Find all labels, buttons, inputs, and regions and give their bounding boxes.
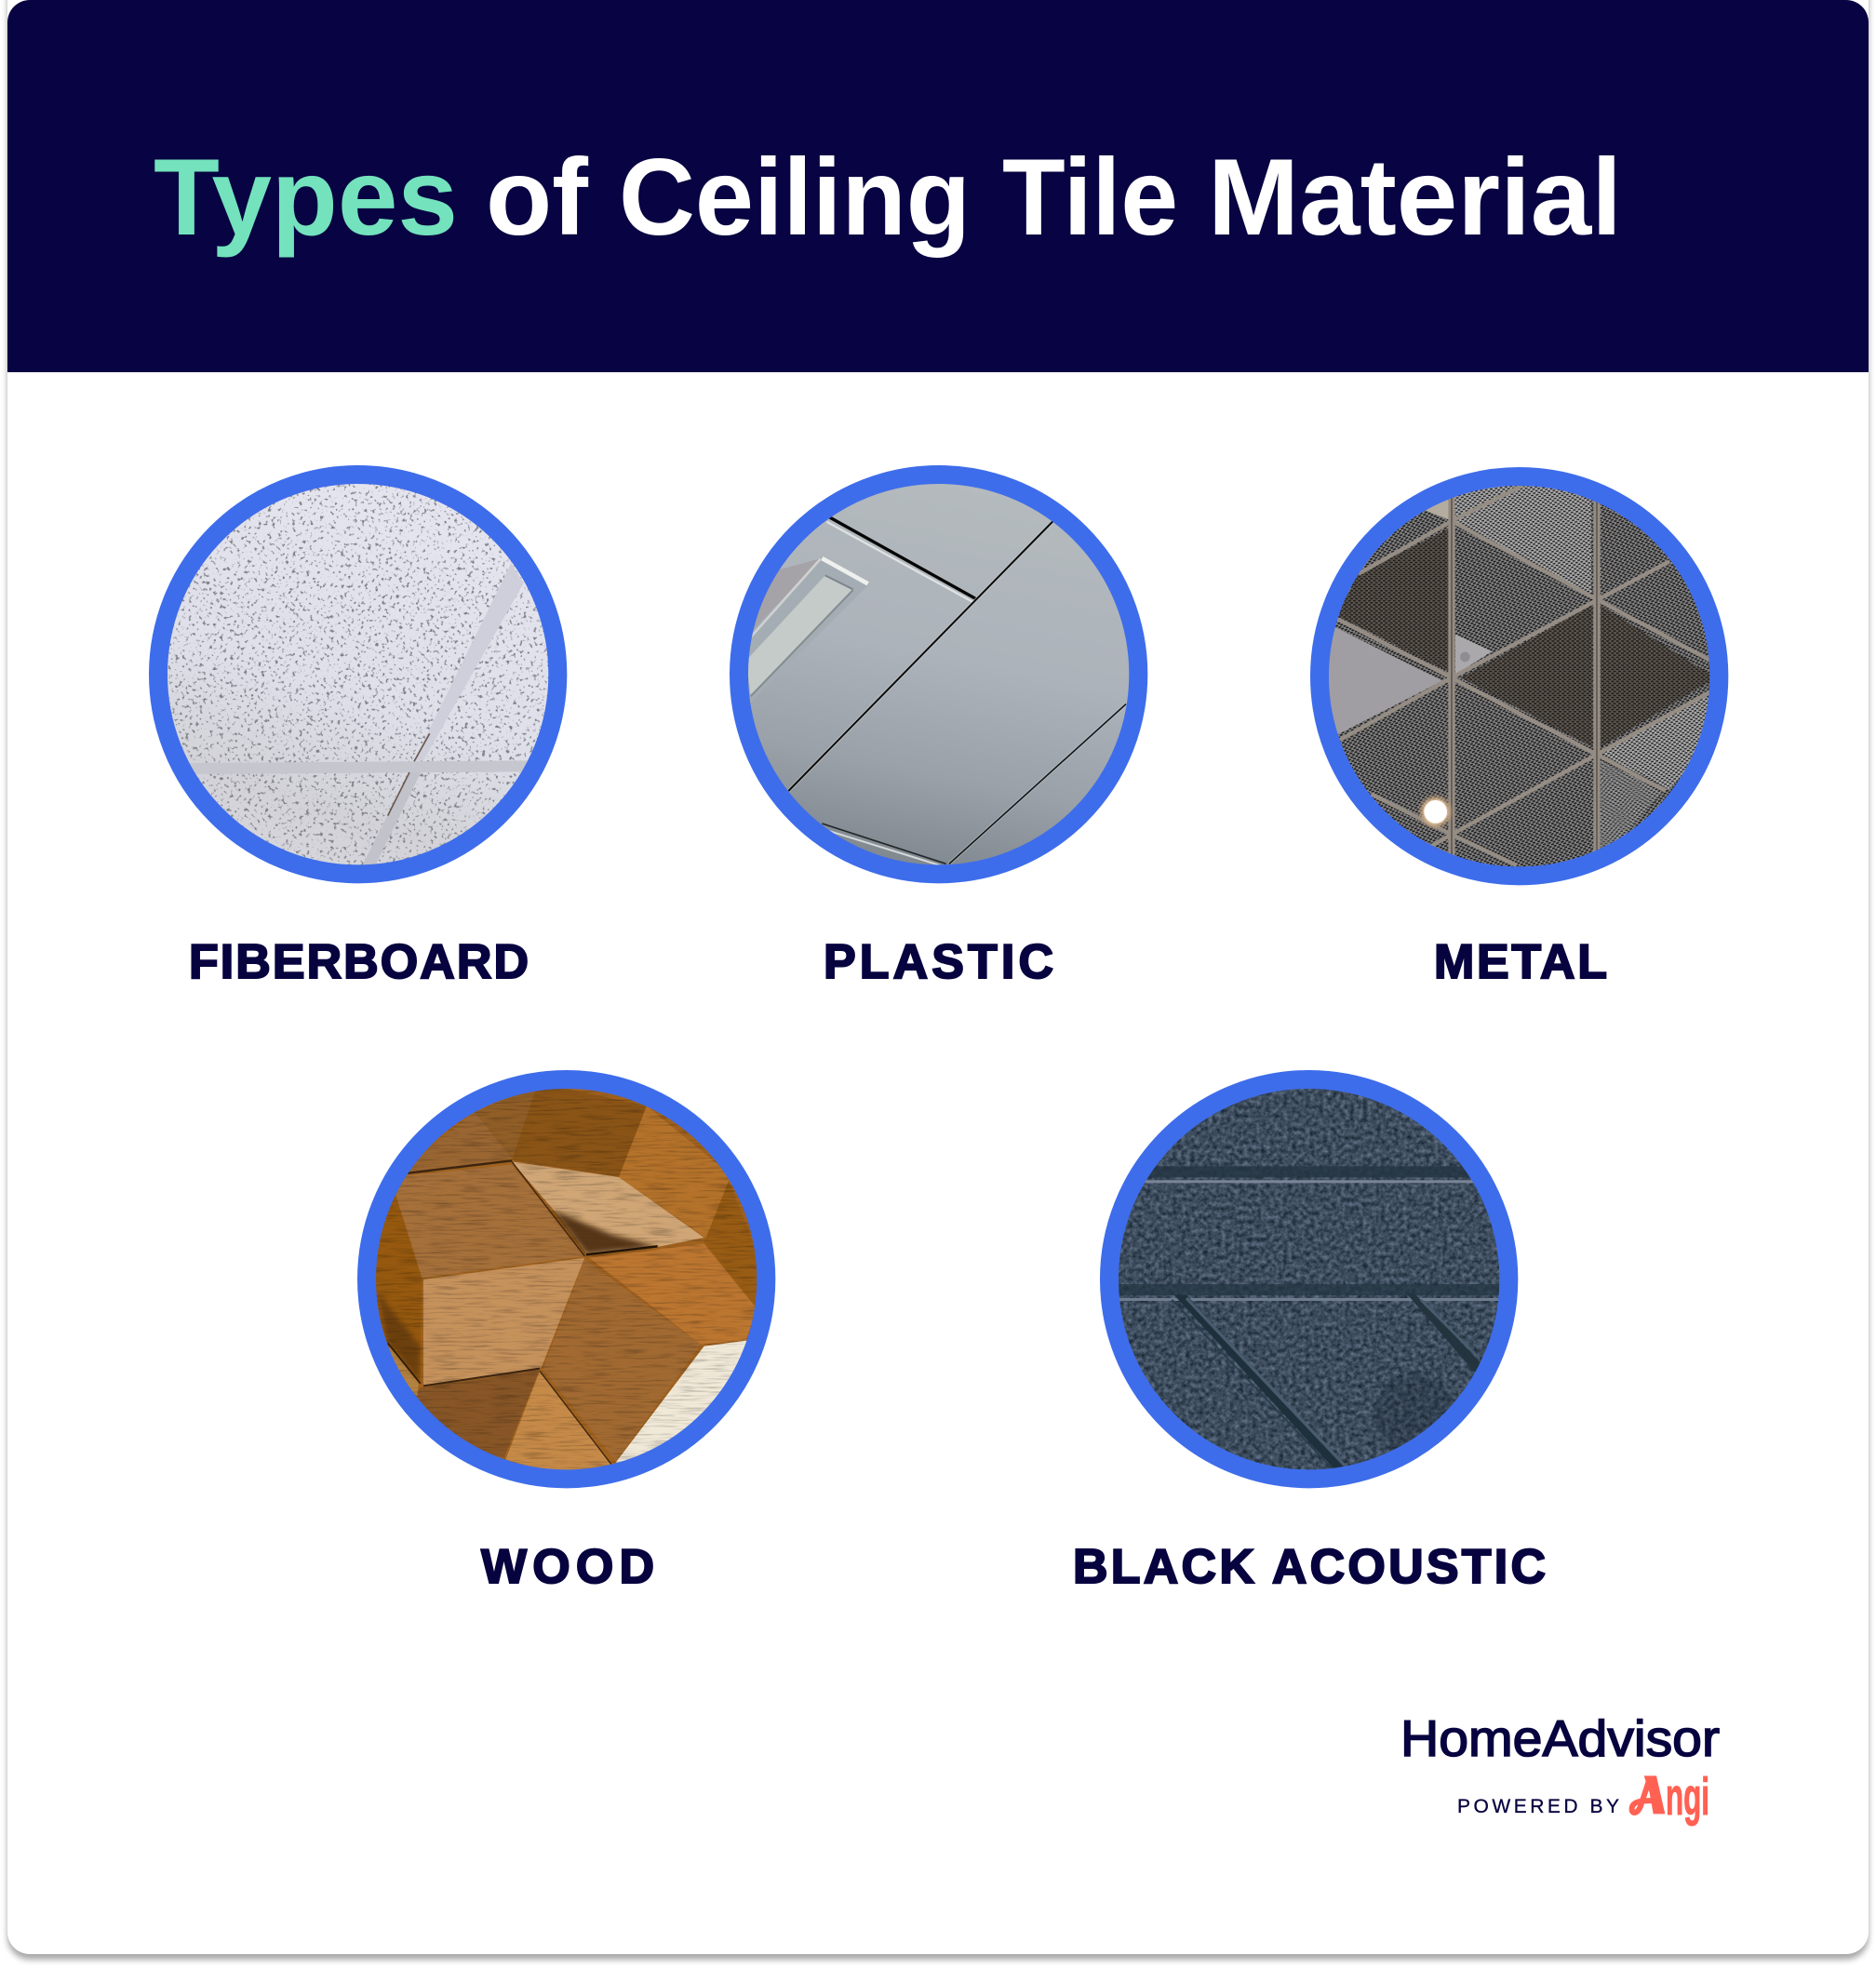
panel: fiberboard — [158, 475, 557, 989]
panel: metal — [1320, 476, 1719, 989]
label: fiberboard: FIBERBOARD — [189, 935, 529, 989]
header banner — [7, 0, 1869, 372]
title: of — [486, 136, 589, 258]
title: Material — [1208, 136, 1622, 258]
logo: HomeAdvisor powered by Angi — [1400, 1709, 1720, 1827]
fiberboard photo — [158, 475, 557, 874]
metal photo — [1320, 476, 1719, 876]
black acoustic photo — [1109, 1079, 1508, 1479]
label: metal: METAL — [1434, 935, 1607, 989]
wood photo — [367, 1079, 766, 1482]
title: Tile — [1002, 136, 1178, 258]
angi logo — [1632, 1767, 1709, 1827]
angi logo: ngi — [1666, 1767, 1709, 1827]
panel: plastic — [739, 475, 1138, 989]
plastic photo — [739, 475, 1138, 874]
label: black acoustic: BLACK ACOUSTIC — [1073, 1540, 1546, 1594]
panel: wood — [367, 1079, 766, 1594]
label: plastic: PLASTIC — [824, 935, 1053, 989]
powered by: POWERED BY — [1457, 1796, 1619, 1817]
title: Ceiling — [619, 136, 971, 258]
title: Types — [154, 136, 458, 258]
title — [154, 136, 1622, 258]
wordmark: HomeAdvisor — [1400, 1709, 1720, 1767]
panel: black acoustic — [1073, 1079, 1546, 1594]
label: wood: WOOD — [481, 1540, 654, 1594]
